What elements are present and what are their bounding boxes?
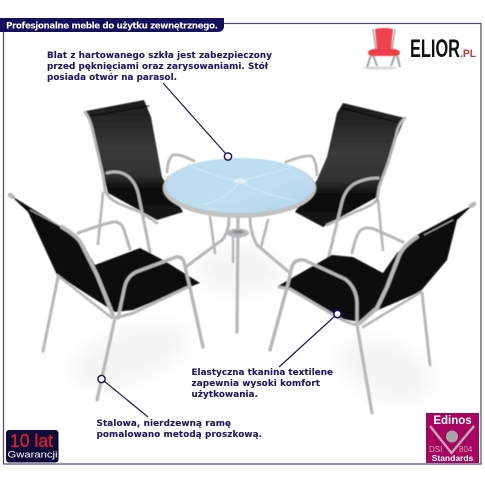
text: table top description: posiada otwór na parasol. — [47, 72, 177, 83]
badge: Edinos standards: 804 — [459, 445, 473, 454]
badge: 10 years warranty — [6, 430, 58, 462]
header banner — [0, 18, 224, 32]
badge: Edinos standards — [426, 413, 479, 463]
header banner: Profesjonalne meble do użytku zewnętrznego. — [6, 22, 218, 32]
text: frame description: pomalowano metodą proszkową. — [96, 430, 262, 440]
table — [162, 158, 316, 332]
badge: 10 years warranty: 10 lat — [10, 430, 53, 451]
badge: Edinos standards: Standards — [432, 453, 474, 463]
callout pointer: table top — [163, 83, 232, 160]
text: frame description — [96, 419, 262, 440]
table glass top — [166, 158, 314, 213]
icon: red chair — [362, 28, 400, 70]
badge: Edinos standards: DSI — [429, 445, 442, 454]
table legs — [187, 218, 290, 332]
callout pointer: frame — [98, 375, 148, 417]
logo: Elior — [362, 28, 476, 70]
logo: Elior: .PL — [460, 48, 476, 60]
chair: top left — [85, 100, 215, 253]
chair: top right — [261, 103, 405, 260]
text: fabric description — [192, 368, 333, 400]
text: frame description: Stalowa, nierdzewną ramę — [96, 419, 231, 429]
text: fabric description: zapewnia wysoki komfort — [192, 379, 320, 389]
table rim — [162, 158, 316, 218]
chair: bottom right — [270, 204, 474, 413]
logo wordmark: ELIOR — [410, 35, 460, 63]
text: fabric description: Elastyczna tkanina textilene — [192, 368, 333, 378]
badge: 10 years warranty: Gwarancji — [8, 450, 58, 460]
text: fabric description: użytkowania. — [192, 390, 258, 400]
badge: Edinos standards: Edinos — [433, 415, 472, 427]
callout pointer: fabric — [279, 310, 341, 367]
text: table top description: Blat z hartowanego szkła jest zabezpieczony — [47, 51, 272, 61]
text: table top description — [47, 51, 272, 83]
text: table top description: przed pęknięciami oraz zarysowaniami. Stół — [47, 61, 269, 72]
chair: bottom left — [10, 195, 203, 400]
ground shadows — [64, 248, 441, 412]
